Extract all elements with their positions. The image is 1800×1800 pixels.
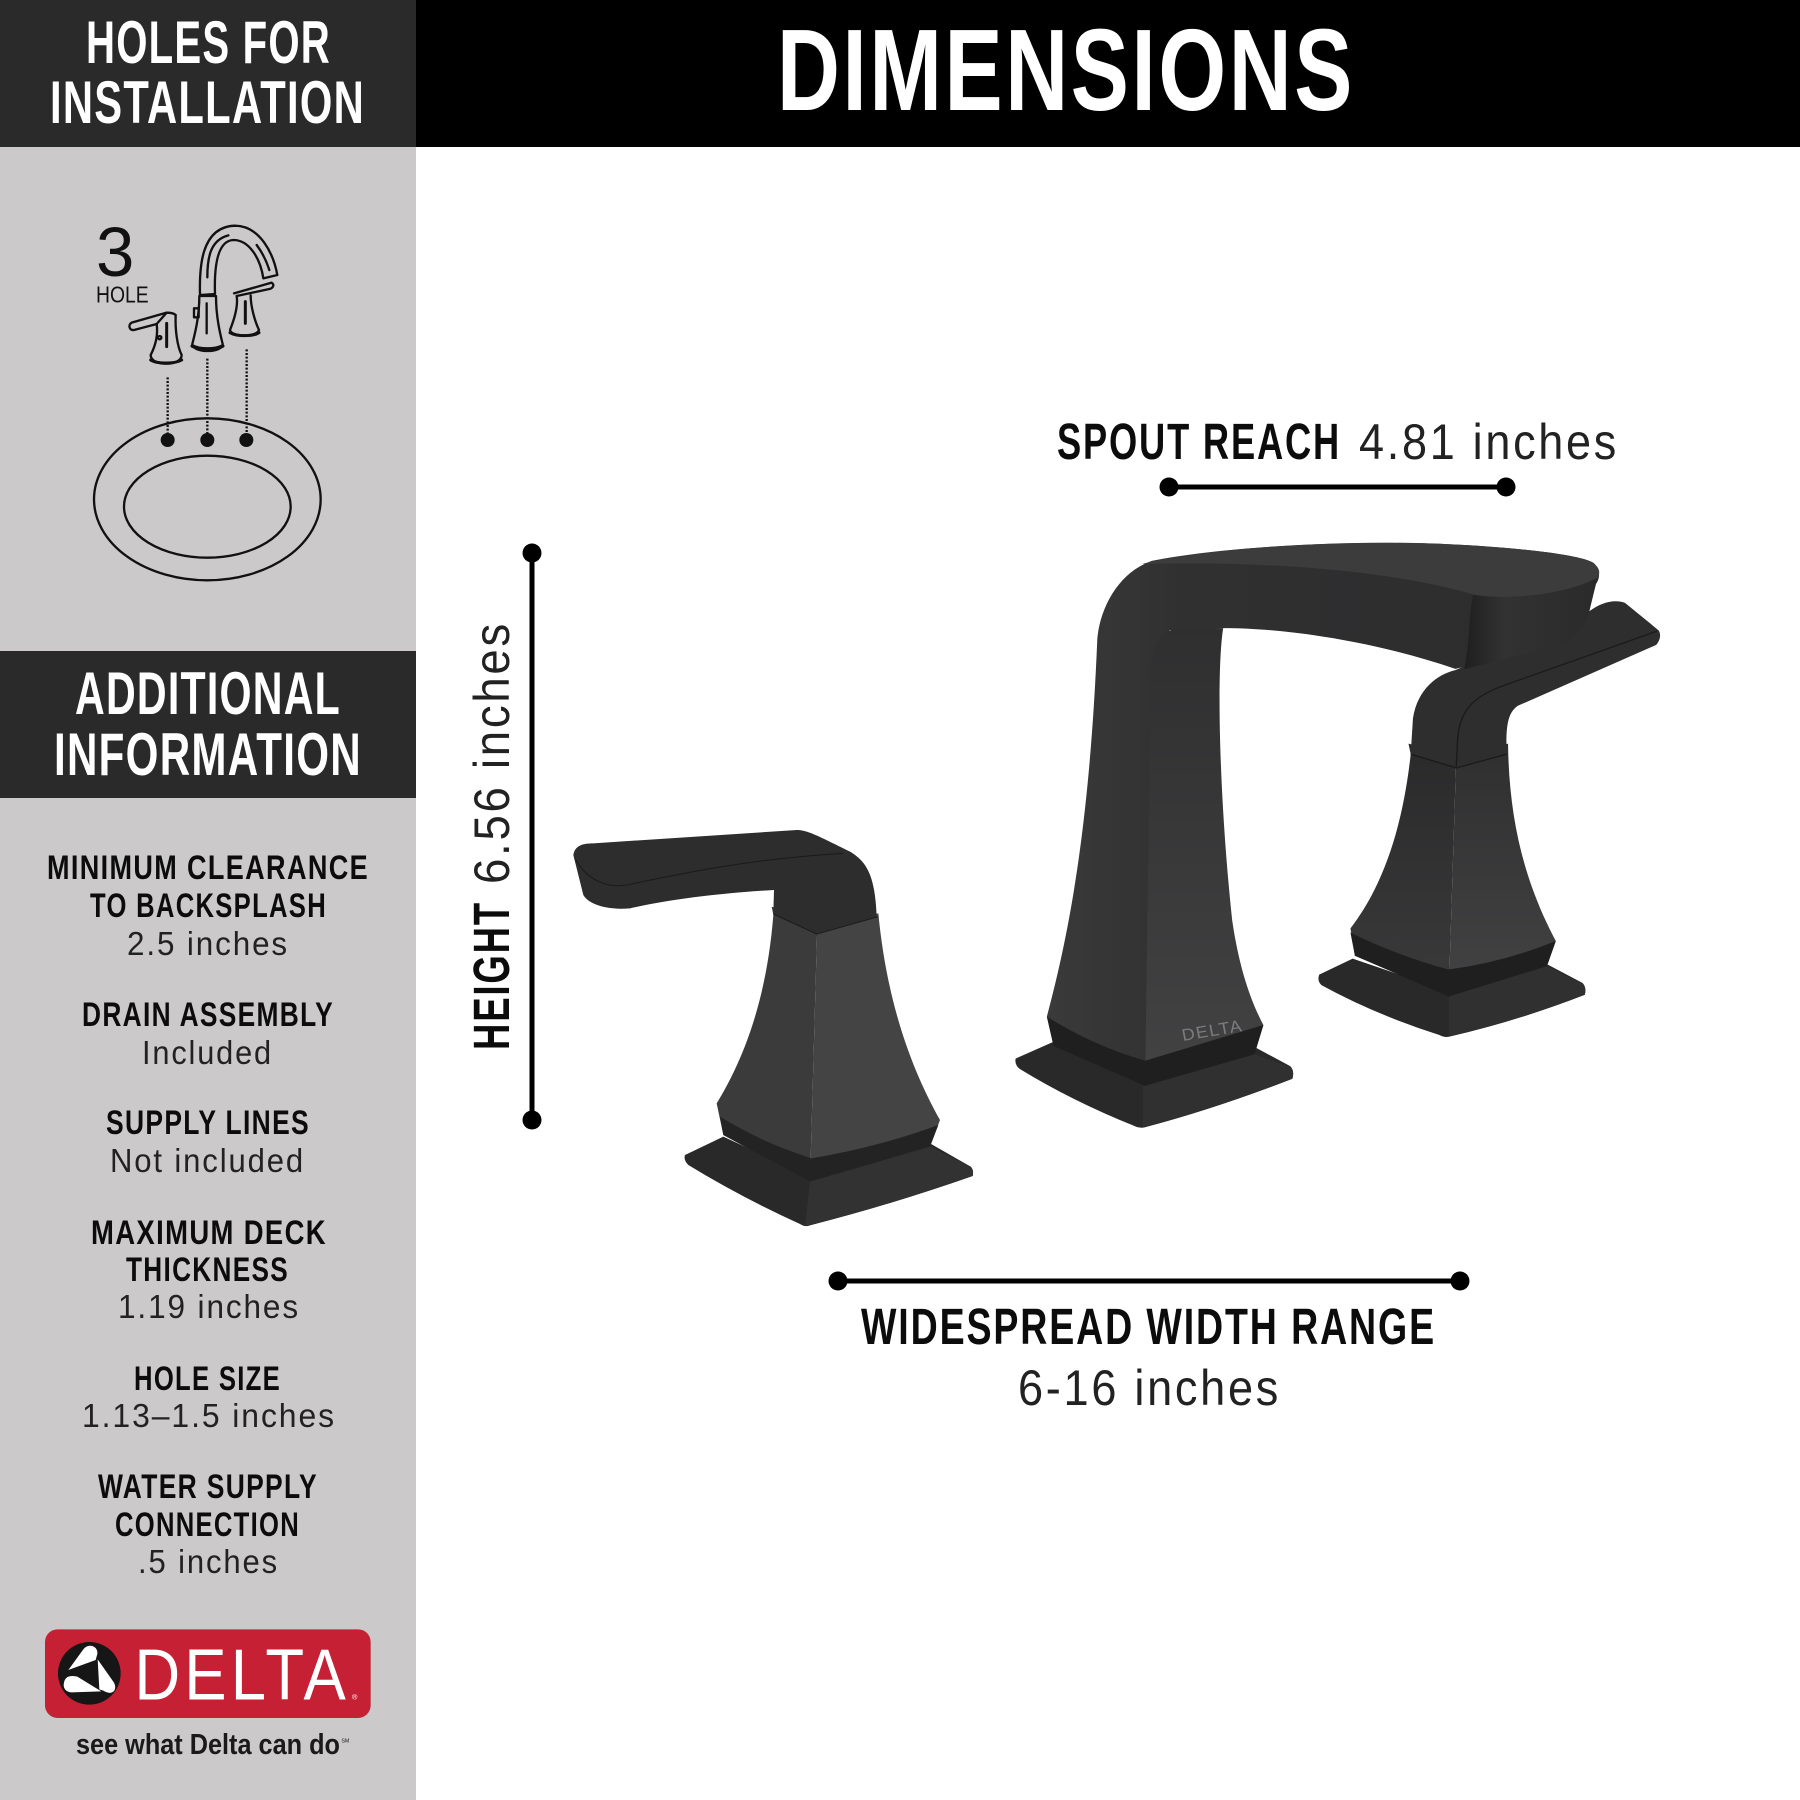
handle body: [1350, 744, 1556, 996]
text block: water supply connection: [98, 1468, 318, 1580]
handle base plate: [1318, 959, 1585, 1037]
heading: holes for installation: INSTALLATION: [50, 69, 365, 136]
text block: water supply connection: .5 inches: [138, 1543, 279, 1580]
text block: drain assembly: DRAIN ASSEMBLY: [82, 996, 334, 1034]
icon: dotted guides and holes: [161, 349, 253, 447]
faucet: right handle: [1318, 601, 1660, 1037]
number: 3 hole: HOLE: [96, 281, 149, 307]
left base plate: [685, 1137, 973, 1226]
title: dimensions: DIMENSIONS: [777, 5, 1355, 135]
dimension: widespread width range: [828, 1272, 1470, 1416]
number: 3 hole: 3: [96, 213, 134, 291]
text block: minimum clearance: MINIMUM CLEARANCE: [47, 849, 369, 887]
heading: additional information: ADDITIONAL: [75, 660, 341, 727]
dimension: height: HEIGHT: [463, 901, 520, 1050]
text block: minimum clearance: [47, 849, 369, 962]
dimension: spout reach: [1057, 413, 1619, 496]
dimension: widespread width range: 6-16 inches: [1018, 1360, 1281, 1416]
logo badge: [45, 1629, 371, 1718]
text block: drain assembly: [82, 996, 334, 1071]
text block: maximum deck thickness: MAXIMUM DECK: [91, 1214, 327, 1252]
icon: sink basin: [94, 418, 321, 580]
faucet: center spout: [1015, 543, 1599, 1128]
registered mark: ®: [352, 1692, 358, 1701]
text block: hole size: 1.13–1.5 inches: [82, 1397, 336, 1434]
panel: sidebar background: [0, 0, 416, 1800]
service mark: SM: [341, 1739, 349, 1745]
spout top face: [1142, 543, 1599, 597]
heading: additional information: INFORMATION: [54, 721, 362, 788]
text block: supply lines: Not included: [110, 1142, 305, 1179]
text block: maximum deck thickness: THICKNESS: [126, 1251, 289, 1289]
dimension: spout reach: SPOUT REACH: [1057, 413, 1341, 470]
title: dimensions: [416, 0, 1800, 147]
text block: minimum clearance: TO BACKSPLASH: [90, 887, 327, 925]
dimension: widespread width range: WIDESPREAD WIDTH RANGE: [861, 1298, 1436, 1355]
text block: supply lines: SUPPLY LINES: [106, 1104, 310, 1142]
number: 3 hole: [96, 213, 149, 307]
spout logo: DELTA: [1180, 1016, 1244, 1045]
logo: delta: [45, 1629, 371, 1761]
text block: drain assembly: Included: [142, 1034, 273, 1071]
spout body: [1047, 543, 1599, 1086]
text block: minimum clearance: 2.5 inches: [127, 925, 289, 962]
text block: hole size: HOLE SIZE: [134, 1360, 281, 1398]
text block: supply lines: [106, 1104, 310, 1179]
handle lever: [1411, 601, 1660, 767]
text block: water supply connection: WATER SUPPLY: [98, 1468, 318, 1506]
text block: water supply connection: CONNECTION: [115, 1506, 300, 1544]
text block: hole size: [82, 1360, 336, 1434]
faucet: left handle: [573, 830, 973, 1226]
left handle body: [717, 907, 940, 1182]
spout base plate: [1015, 1042, 1293, 1128]
left handle lever edge: [575, 853, 878, 934]
dimension: height: [463, 544, 542, 1130]
left handle lever: [573, 830, 877, 933]
tagline: see what Delta can do: [76, 1729, 340, 1761]
heading: holes for installation: HOLES FOR: [86, 9, 331, 76]
dimension: spout reach: 4.81 inches: [1359, 414, 1619, 470]
spout mouth front: [1464, 571, 1598, 669]
heading: holes for installation: [0, 0, 416, 147]
icon: three hole sink diagram: [94, 213, 321, 580]
icon: spout line drawing: [129, 226, 277, 364]
handle lever edge: [1411, 631, 1657, 768]
icon: delta mark: [58, 1642, 121, 1705]
text block: maximum deck thickness: 1.19 inches: [118, 1288, 300, 1325]
heading: additional information: [0, 651, 416, 798]
dimension: height: 6.56 inches: [464, 621, 520, 884]
text block: maximum deck thickness: [91, 1214, 327, 1325]
logo wordmark: DELTA: [134, 1635, 350, 1715]
